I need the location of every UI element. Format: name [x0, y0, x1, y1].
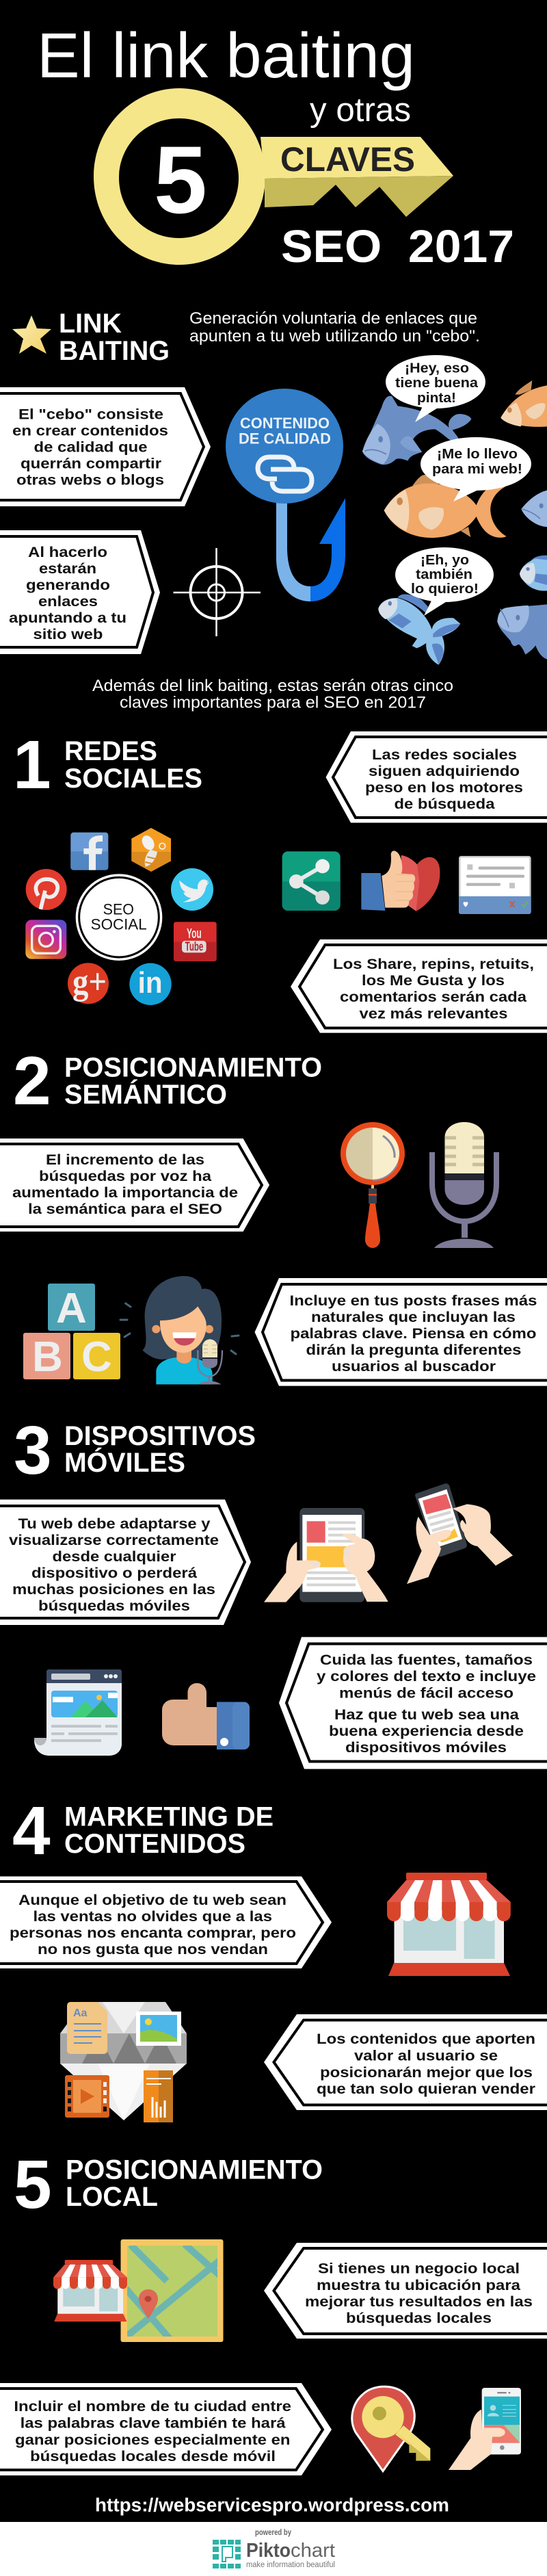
icon: film strip: [65, 2075, 109, 2118]
callout: valor al usuario: [264, 2014, 547, 2110]
callout: web adaptarse: visualizarse correctamente: [9, 1532, 219, 1548]
icon: piktochart logo: [213, 2540, 241, 2568]
icon: document: Aa: [73, 2007, 88, 2019]
badge: seo social: SEO: [103, 900, 134, 918]
callout: valor al usuario: Los contenidos que aporten: [317, 2031, 535, 2047]
callout: negocio local: [264, 2243, 547, 2339]
subtitle: CLAVES: CLAVES: [280, 140, 415, 179]
callout: generando enlaces: [0, 530, 160, 654]
icon: thumbs up with blue cuff: [162, 1683, 250, 1749]
number 5: 5: [14, 2146, 52, 2223]
icon: thumb and heart: [361, 851, 440, 911]
icon: abc blocks: B: [32, 1333, 63, 1381]
speech bubble: me lo llevo: ¡Me lo llevo: [437, 447, 518, 462]
callout: valor al usuario: que tan solo quieran vender: [317, 2081, 536, 2097]
text: link baiting definition: apunten a tu web utilizando un "cebo".: [189, 327, 480, 346]
icon: comment card: [459, 856, 531, 914]
icon: twitter: [171, 868, 213, 911]
callout: fuentes y experiencia: menús de fácil acceso: [339, 1684, 513, 1701]
icon: tablet in hands: [264, 1508, 388, 1602]
icon: abc blocks: C: [81, 1333, 112, 1381]
callout: share repins retuits: Los Share, repins, retuits,: [333, 956, 534, 972]
text: link baiting definition: Generación voluntaria de enlaces que: [189, 309, 477, 328]
number 3: 3: [14, 1412, 52, 1489]
speech bubble: yo tambien lo quiero: [395, 547, 494, 616]
icons: hands with tablet and phone: [264, 1483, 513, 1602]
icon: crosshair target: [174, 548, 261, 636]
icon: instagram: [25, 920, 66, 959]
callout: share repins retuits: [291, 939, 547, 1033]
callout: redes sociales peso: de búsqueda: [394, 796, 496, 812]
footer: piktochart: [0, 2522, 547, 2576]
callout: share repins retuits: comentarios serán cada: [340, 989, 527, 1005]
heading: posicionamiento local: LOCAL: [66, 2182, 158, 2212]
callout: el cebo: otras webs o blogs: [16, 472, 164, 489]
bait: contenido de calidad: CONTENIDO: [240, 415, 330, 432]
callout: nombre de tu ciudad: las palabras clave también te hará: [21, 2415, 286, 2432]
callout: negocio local: Si tienes un negocio local: [318, 2261, 520, 2277]
heading: redes sociales: SOCIALES: [64, 764, 202, 794]
callout: el cebo: en crear contenidos: [12, 423, 168, 439]
speech bubble: hey eso tiene buena pinta: pinta!: [417, 391, 456, 406]
callout: el cebo: [0, 387, 211, 506]
heading: Link baiting: BAITING: [59, 336, 170, 366]
speech bubble: yo tambien lo quiero: lo quiero!: [411, 582, 479, 597]
callout: frases naturales: Incluye en tus posts frases más: [290, 1292, 537, 1309]
callout: fuentes y experiencia: dispositivos móviles: [345, 1739, 507, 1756]
speech bubble: yo tambien lo quiero: también: [416, 567, 472, 582]
heading: redes sociales: REDES: [64, 736, 157, 766]
icon: pinterest: [26, 869, 67, 910]
source url: https://webservicespro.wordpress.com: [95, 2495, 449, 2515]
heading: marketing de contenidos: [64, 1802, 274, 1859]
speech bubble: yo tambien lo quiero: ¡Eh, yo: [421, 553, 469, 568]
icon: linkedin: in: [138, 966, 163, 1000]
icon: phone in hands: [407, 1483, 513, 1584]
callout: web adaptarse: Tu web debe adaptarse y: [18, 1515, 211, 1532]
heading: marketing de contenidos: MARKETING DE: [64, 1802, 274, 1832]
callout: frases naturales: palabras clave. Piensa en cómo: [290, 1325, 536, 1342]
callout: web adaptarse: [0, 1500, 251, 1625]
callout: valor al usuario: posicionarán mejor que los: [320, 2064, 533, 2081]
callout: web adaptarse: búsquedas móviles: [38, 1598, 190, 1614]
heading: posicionamiento semantico: SEMÁNTICO: [64, 1080, 227, 1110]
speech bubble: me lo llevo: [421, 437, 531, 502]
callout: el cebo: de calidad que: [34, 439, 148, 456]
callout: generando enlaces: estarán: [39, 560, 96, 577]
icon: youtube: [174, 922, 217, 961]
icon: woman speaking into microphone: [120, 1276, 239, 1384]
heading: redes sociales: [64, 736, 202, 794]
callout: nombre de tu ciudad: ganar posiciones especialmente en: [15, 2432, 290, 2448]
callout: redes sociales peso: siguen adquiriendo: [369, 763, 520, 779]
footer: piktochart: powered by: [255, 2529, 291, 2537]
heading: posicionamiento local: [66, 2155, 323, 2212]
text: intro to five keys: [92, 677, 453, 712]
icon: abc blocks: [23, 1284, 120, 1381]
heading: posicionamiento local: POSICIONAMIENTO: [66, 2155, 323, 2185]
callout: web adaptarse: dispositivo o perderá: [31, 1565, 198, 1581]
callout: fuentes y experiencia: Cuida las fuentes, tamaños: [320, 1652, 533, 1668]
heading: Link baiting: LINK: [59, 309, 122, 339]
heading: Link baiting: [59, 309, 170, 366]
callout: fuentes y experiencia: y colores del texto e incluye: [317, 1668, 536, 1684]
callout: fuentes y experiencia: buena experiencia desde: [329, 1723, 524, 1739]
callout: nombre de tu ciudad: [0, 2383, 332, 2475]
callout: generando enlaces: Al hacerlo: [28, 544, 107, 560]
callout: frases naturales: naturales que incluyan las: [311, 1309, 516, 1325]
text: link baiting definition: [189, 309, 480, 346]
bait: contenido de calidad: [226, 389, 343, 504]
fish: bottom blue: [378, 595, 460, 665]
diamond: [60, 2002, 187, 2120]
text: intro to five keys: Además del link baiting, estas serán otras cinco: [92, 677, 453, 695]
callout: ventas: [0, 1876, 332, 1968]
callout: busquedas por voz: búsquedas por voz ha: [39, 1168, 212, 1184]
callout: negocio local: mejorar tus resultados en las: [305, 2293, 533, 2310]
callout: nombre de tu ciudad: Incluir el nombre de tu ciudad entre: [14, 2398, 291, 2415]
speech bubble: hey eso tiene buena pinta: ¡Hey, eso: [405, 361, 469, 376]
badge: seo social: SOCIAL: [91, 915, 147, 933]
heading: dispositivos moviles: DISPOSITIVOS: [64, 1421, 256, 1451]
callout: el cebo: El "cebo" consiste: [18, 406, 163, 423]
callout: fuentes y experiencia: [279, 1637, 547, 1769]
icon: diamond with content types: [60, 2002, 187, 2122]
callout: generando enlaces: generando: [26, 577, 110, 593]
subtitle: SEO 2017: SEO 2017: [281, 221, 514, 272]
heading: posicionamiento semantico: [64, 1052, 322, 1110]
callout: valor al usuario: valor al usuario se: [354, 2047, 498, 2064]
callout: negocio local: muestra tu ubicación para: [317, 2277, 521, 2293]
callout: busquedas por voz: la semántica para el SEO: [28, 1201, 222, 1217]
illustration: fish school: [362, 380, 547, 665]
callout: generando enlaces: enlaces: [38, 593, 98, 610]
title: El link baiting: El link baiting: [37, 20, 415, 91]
icon: map with pin: [120, 2239, 223, 2342]
speech bubble: me lo llevo: para mi web!: [432, 462, 522, 477]
heading: posicionamiento semantico: POSICIONAMIENTO: [64, 1052, 322, 1082]
callout: redes sociales peso: Las redes sociales: [372, 746, 517, 763]
icon: location pin with key: [352, 2386, 430, 2471]
text: intro to five keys: claves importantes para el SEO en 2017: [120, 694, 426, 712]
icon: studio microphone: [432, 1122, 496, 1248]
callout: ventas: Aunque el objetivo de tu web sean: [18, 1892, 286, 1908]
icon: magnifying glass: [341, 1122, 405, 1248]
fish: centre orange: [384, 475, 507, 538]
callout: ventas: no nos gusta que nos vendan: [38, 1941, 268, 1957]
number 4: 4: [12, 1793, 51, 1869]
footer: piktochart: chart: [291, 2540, 335, 2562]
icon: hand holding phone: [449, 2388, 521, 2470]
icon: facebook: [70, 833, 108, 870]
callout: share repins retuits: los Me Gusta y los: [362, 972, 505, 989]
icon: picture: [136, 2012, 181, 2046]
callout: generando enlaces: apuntando a tu: [9, 610, 126, 626]
icon: bee hexagon: [131, 828, 171, 872]
icon: document: [67, 2002, 107, 2054]
callout: redes sociales peso: peso en los motores: [365, 779, 523, 796]
callout: negocio local: búsquedas locales: [346, 2310, 492, 2326]
fish: bottom right blue: [497, 604, 547, 659]
icon: web page document: [34, 1669, 122, 1756]
speech bubble: hey eso tiene buena pinta: tiene buena: [395, 376, 479, 391]
icon: linkedin: [129, 963, 172, 1005]
icon: youtube: You: [187, 926, 202, 941]
icon: big key with number 5: [94, 88, 453, 265]
icon: share: [282, 851, 341, 911]
callout: frases naturales: dirán la pregunta diferentes: [306, 1342, 522, 1358]
number 2: 2: [13, 1043, 51, 1119]
callout: busquedas por voz: aumentado la importancia de: [12, 1184, 238, 1201]
subtitle: y otras: y otras: [310, 92, 411, 129]
icon: star: [12, 315, 51, 354]
fish: top blue: [362, 396, 471, 465]
icons: share, like, comment: [282, 851, 531, 914]
icon: bar chart page: [144, 2070, 173, 2122]
heading: marketing de contenidos: CONTENIDOS: [64, 1829, 245, 1859]
footer: piktochart: make information beautiful: [246, 2561, 335, 2569]
callout: frases naturales: usuarios al buscador: [332, 1358, 496, 1375]
diagram: SEO social icons: [25, 828, 217, 1005]
callout: share repins retuits: vez más relevantes: [360, 1006, 508, 1022]
callout: redes sociales peso: [325, 731, 547, 822]
icon: abc blocks: A: [56, 1285, 87, 1332]
heading: dispositivos moviles: MÓVILES: [64, 1448, 185, 1478]
badge: seo social: [76, 874, 162, 961]
bait: contenido de calidad: DE CALIDAD: [239, 430, 331, 447]
callout: frases naturales: [254, 1278, 547, 1386]
icon: big key with number 5: 5: [154, 126, 207, 233]
icon: google plus: g+: [72, 961, 107, 1002]
callout: busquedas por voz: El incremento de las: [46, 1152, 204, 1168]
fish: right blue: [521, 491, 547, 527]
icon: fish hook: [276, 498, 345, 601]
icon: store: [387, 1873, 511, 1976]
callout: web adaptarse: desde cualquier: [52, 1548, 176, 1565]
callout: busquedas por voz: [0, 1139, 269, 1232]
callout: generando enlaces: sitio web: [33, 626, 103, 642]
callout: nombre de tu ciudad: búsquedas locales desde móvil: [30, 2448, 276, 2464]
speech bubble: hey eso tiene buena pinta: [386, 355, 485, 422]
callout: el cebo: querrán compartir: [21, 456, 162, 472]
callout: ventas: las ventas no olvides que a las: [33, 1908, 272, 1925]
icon: chain link: [258, 457, 312, 491]
callout: fuentes y experiencia: Haz que tu web sea una: [334, 1706, 520, 1723]
heading: dispositivos moviles: [64, 1421, 256, 1478]
icon: small store: [53, 2260, 127, 2321]
footer: piktochart: Pikto: [246, 2540, 291, 2562]
callout: ventas: personas nos encanta comprar, pero: [10, 1925, 296, 1941]
fish: right light blue: [520, 556, 547, 591]
icon: youtube: Tube: [185, 939, 203, 954]
number 1: 1: [13, 727, 51, 803]
callout: web adaptarse: muchas posiciones en las: [12, 1581, 215, 1598]
fish: top right orange: [501, 380, 547, 427]
